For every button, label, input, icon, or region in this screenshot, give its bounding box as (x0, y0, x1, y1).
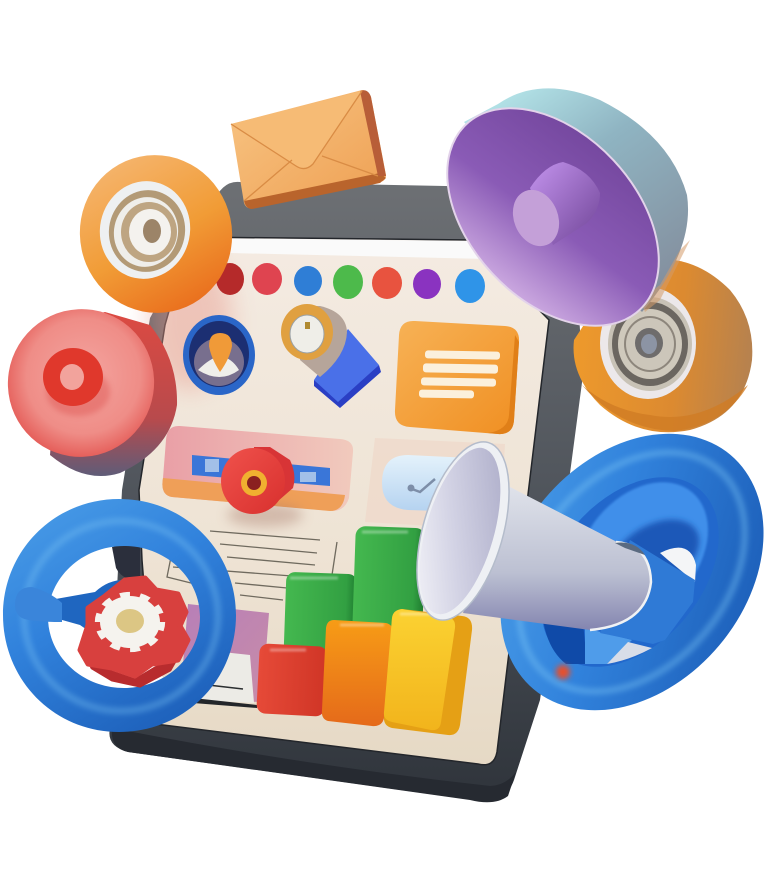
handle on left ring (15, 580, 130, 636)
white megaphone (399, 432, 695, 644)
icon: envelope (231, 90, 386, 209)
tablet corner seen through left ring (112, 540, 140, 582)
pink banner panel (162, 426, 353, 511)
white gap in tablet seen through left ring (40, 575, 172, 705)
small purple card (180, 604, 269, 708)
small badge with blue block (281, 304, 381, 408)
text lines panel (167, 531, 337, 600)
row of coloured dots (216, 263, 485, 303)
target wheel: top left (65, 141, 247, 327)
profile avatar badge (183, 315, 255, 395)
bar chart (256, 526, 472, 735)
target wheel: right (574, 259, 752, 432)
blue ring: right (446, 382, 768, 762)
red knob on banner (221, 447, 303, 527)
red cylinder knob (0, 288, 177, 478)
icon: red gear with white cog (80, 578, 188, 686)
purple megaphone dish (406, 68, 700, 366)
orange note card (395, 321, 519, 434)
tablet body (109, 182, 583, 802)
tablet screen (139, 237, 549, 765)
blue ring: left steering wheel (3, 499, 236, 732)
faint right panel with toggle (365, 438, 505, 530)
